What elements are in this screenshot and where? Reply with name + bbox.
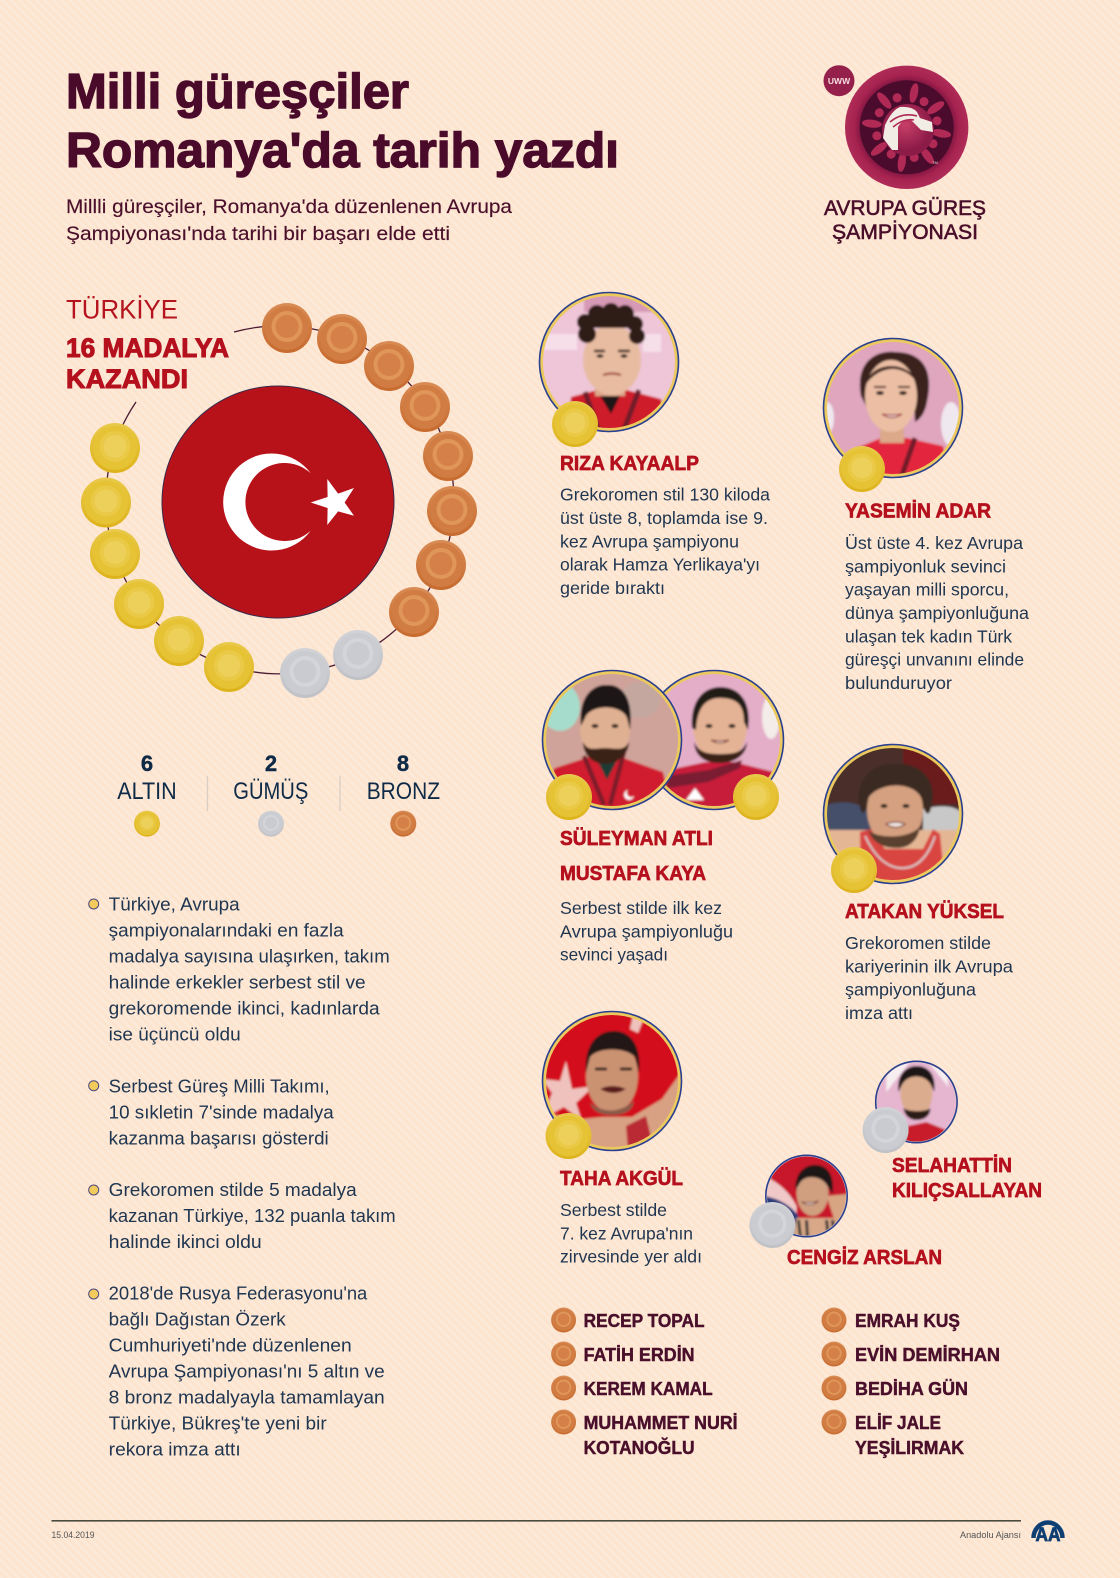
- portrait: Atakan Yüksel: [823, 744, 963, 884]
- description: 7. kez Avrupa'nın: [560, 1223, 693, 1243]
- icon: UWW logo: TM: [932, 160, 938, 165]
- portrait: Süleyman Atlı: [540, 670, 682, 810]
- description: zirvesinde yer aldı: [560, 1247, 702, 1267]
- description: [560, 1200, 702, 1267]
- medal right: [733, 774, 779, 820]
- heading: Türkiye medal count: 16 MADALYA: [66, 333, 229, 363]
- description: sevinci yaşadı: [560, 945, 668, 965]
- gold tally: ALTIN: [117, 778, 177, 805]
- bullet 2: 10 sıkletin 7'sinde madalya: [109, 1101, 335, 1122]
- medalist: MUHAMMET NURİ: [584, 1412, 738, 1433]
- heading: Türkiye medal count: [66, 294, 229, 394]
- panel: Rıza Kayaalp: [539, 292, 770, 598]
- subtitle: Şampiyonası'nda tarihi bir başarı elde etti: [66, 223, 450, 245]
- description: şampiyonluğuna: [845, 980, 976, 1000]
- date: 15.04.2019: [52, 1530, 94, 1540]
- medalist: [551, 1308, 705, 1332]
- bullet 4: 2018'de Rusya Federasyonu'na: [109, 1282, 368, 1304]
- description: [845, 933, 1013, 1023]
- bullet 3: [89, 1179, 396, 1252]
- medalist: ELİF JALE: [855, 1412, 941, 1433]
- credit: Anadolu Ajansı: [960, 1530, 1021, 1540]
- bullet 4: rekora imza attı: [109, 1438, 241, 1460]
- name: RIZA KAYAALP: [560, 453, 699, 475]
- description: Serbest stilde: [560, 1200, 667, 1220]
- medalist: [822, 1342, 1000, 1366]
- medalist: [822, 1410, 965, 1458]
- description: Grekoromen stilde: [845, 933, 991, 953]
- description: Grekoromen stil 130 kiloda: [560, 485, 770, 505]
- description: dünya şampiyonluğuna: [845, 603, 1029, 623]
- name: SELAHATTİN: [892, 1154, 1012, 1177]
- gold tally: 6: [141, 751, 153, 776]
- panel: Taha Akgül: [542, 1011, 702, 1267]
- description: şampiyonluk sevinci: [845, 556, 1006, 576]
- bronze tally: [367, 751, 440, 837]
- description: [845, 533, 1029, 693]
- title: [66, 65, 619, 178]
- medal: [552, 401, 598, 447]
- bullet 4: [89, 1282, 385, 1460]
- bullet 1: halinde erkekler serbest stil ve: [109, 972, 366, 993]
- bullet 3: Grekoromen stilde 5 madalya: [109, 1179, 358, 1200]
- medalist: [551, 1410, 738, 1458]
- portrait: Yasemin Adar: [820, 338, 963, 478]
- panel: Selahattin Kılıçsallayan: [863, 1060, 1042, 1202]
- portrait: Rıza Kayaalp: [539, 292, 679, 432]
- silver tally: GÜMÜŞ: [233, 778, 308, 805]
- heading: Türkiye medal count: KAZANDI: [66, 364, 188, 394]
- medalist: [822, 1376, 968, 1400]
- medalist: FATİH ERDİN: [584, 1344, 695, 1365]
- description: yaşayan milli sporcu,: [845, 580, 1009, 600]
- icon: Turkish flag circle: [162, 386, 394, 618]
- subtitle: Millli güreşçiler, Romanya'da düzenlenen Avrupa: [66, 196, 512, 218]
- medalist: EVİN DEMİRHAN: [855, 1344, 1000, 1365]
- bullet 4: Türkiye, Bükreş'te yeni bir: [109, 1412, 327, 1434]
- title: Romanya'da tarih yazdı: [66, 124, 619, 178]
- medal: [831, 847, 877, 893]
- names: SÜLEYMAN ATLI: [560, 827, 713, 850]
- bullet 1: grekoromende ikinci, kadınlarda: [109, 998, 381, 1019]
- footer: [52, 1520, 1062, 1546]
- bronze tally: BRONZ: [367, 778, 440, 805]
- medals ring: [81, 303, 477, 698]
- description: olarak Hamza Yerlikaya'yı: [560, 555, 760, 575]
- bullet 4: Avrupa Şampiyonası'nı 5 altın ve: [109, 1360, 385, 1382]
- title: Milli güreşçiler: [66, 65, 409, 119]
- medal: [749, 1202, 795, 1248]
- description: Üst üste 4. kez Avrupa: [845, 533, 1023, 553]
- bronze medalists column 2: [822, 1308, 1000, 1458]
- icon: Anadolu Ajansı logo: AA: [1036, 1525, 1061, 1546]
- description: [560, 898, 733, 965]
- description: kez Avrupa şampiyonu: [560, 531, 739, 551]
- name: KILIÇSALLAYAN: [892, 1180, 1042, 1202]
- medalist: KEREM KAMAL: [584, 1378, 713, 1399]
- bullet 1: şampiyonalarındaki en fazla: [109, 920, 345, 941]
- medal: [546, 1113, 592, 1159]
- icon: UWW logo: [824, 65, 968, 189]
- heading: Türkiye medal count: TÜRKİYE: [66, 294, 178, 325]
- panel: Cengiz Arslan: [749, 1154, 942, 1269]
- bullet 3: halinde ikinci oldu: [109, 1231, 262, 1252]
- description: güreşçi unvanını elinde: [845, 650, 1024, 670]
- bronze medalists column 1: [551, 1308, 738, 1458]
- portrait: Selahattin Kılıçsallayan: [874, 1060, 958, 1144]
- subtitle: [66, 196, 512, 245]
- bullet 2: [89, 1075, 335, 1148]
- medal left: [546, 774, 592, 820]
- description: Avrupa şampiyonluğu: [560, 921, 733, 941]
- description: imza attı: [845, 1003, 913, 1023]
- medal tally legend: [117, 751, 440, 837]
- description: kariyerinin ilk Avrupa: [845, 956, 1013, 976]
- medalist: [551, 1376, 713, 1400]
- medalist: KOTANOĞLU: [584, 1437, 695, 1458]
- bullet 1: [89, 894, 390, 1045]
- medalist: [822, 1308, 960, 1332]
- medalist: EMRAH KUŞ: [855, 1310, 960, 1331]
- description: üst üste 8, toplamda ise 9.: [560, 508, 768, 528]
- logo caption: [824, 197, 986, 244]
- medal: [839, 446, 885, 492]
- medalist: RECEP TOPAL: [584, 1310, 705, 1331]
- bullet 1: Türkiye, Avrupa: [109, 894, 241, 915]
- gold tally: [117, 751, 177, 837]
- medal: [863, 1107, 909, 1153]
- description: Serbest stilde ilk kez: [560, 898, 722, 918]
- bronze tally: 8: [397, 751, 409, 776]
- silver tally: 2: [265, 751, 277, 776]
- portrait: Mustafa Kaya: [663, 670, 784, 810]
- name: TAHA AKGÜL: [560, 1167, 683, 1190]
- panel: Süleyman Atlı and Mustafa Kaya: [540, 670, 784, 965]
- names: MUSTAFA KAYA: [560, 863, 706, 885]
- bullet 4: 8 bronz madalyayla tamamlayan: [109, 1386, 385, 1408]
- description: geride bıraktı: [560, 578, 665, 598]
- logo caption: ŞAMPİYONASI: [832, 221, 978, 244]
- panel: Yasemin Adar: [820, 338, 1029, 693]
- bullet 1: ise üçüncü oldu: [109, 1024, 241, 1045]
- names: [560, 827, 713, 885]
- description: ulaşan tek kadın Türk: [845, 626, 1012, 646]
- silver tally: [233, 751, 308, 837]
- bullet 1: madalya sayısına ulaşırken, takım: [109, 946, 390, 967]
- bullet list: [89, 894, 396, 1460]
- name: YASEMİN ADAR: [845, 500, 992, 523]
- logo caption: AVRUPA GÜREŞ: [824, 197, 986, 220]
- description: bulunduruyor: [845, 673, 952, 693]
- medalist: BEDİHA GÜN: [855, 1378, 968, 1399]
- medalist: YEŞİLIRMAK: [855, 1437, 965, 1458]
- medal ring connector: [106, 326, 454, 674]
- panel: Atakan Yüksel: [823, 744, 1013, 1023]
- bullet 4: Cumhuriyeti'nde düzenlenen: [109, 1334, 352, 1356]
- portrait: Taha Akgül: [542, 1011, 682, 1151]
- bullet 3: kazanan Türkiye, 132 puanla takım: [109, 1205, 396, 1226]
- name: ATAKAN YÜKSEL: [845, 900, 1004, 923]
- medalist: [551, 1342, 695, 1366]
- bullet 2: kazanma başarısı gösterdi: [109, 1127, 329, 1148]
- portrait: Cengiz Arslan: [764, 1154, 848, 1238]
- name: [892, 1154, 1042, 1202]
- icon: UWW logo: UWW: [828, 76, 851, 86]
- bullet 4: bağlı Dağıstan Özerk: [109, 1308, 287, 1330]
- bullet 2: Serbest Güreş Milli Takımı,: [109, 1075, 330, 1096]
- name: CENGİZ ARSLAN: [787, 1246, 942, 1269]
- description: [560, 485, 770, 598]
